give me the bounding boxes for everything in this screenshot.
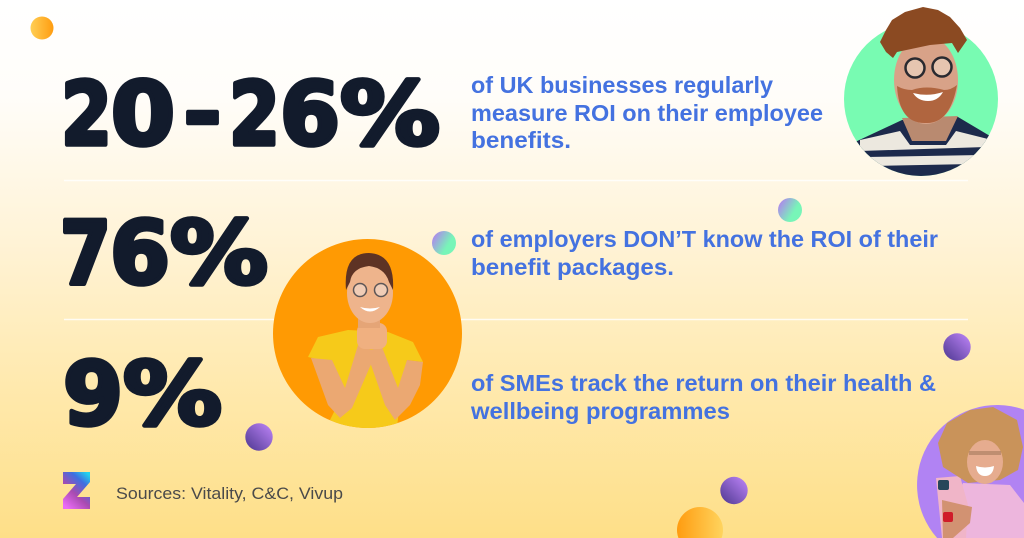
statistic: 20–26%: 2 [61, 64, 112, 166]
statistic: 76%: % [170, 203, 268, 305]
sources note: Sources: Vitality, C&C, Vivup [116, 484, 343, 503]
statistic: 9%: 9 [63, 344, 123, 446]
description: regularly measure ROI: benefits. [471, 127, 571, 153]
description: don't know ROI: benefit packages. [471, 254, 674, 280]
statistic: 76%: 7 [60, 203, 111, 305]
description: don't know ROI [471, 226, 938, 280]
description: regularly measure ROI [471, 72, 823, 153]
description: SMEs track return: wellbeing programmes [470, 398, 730, 424]
description: don't know ROI: of employers DON’T know the ROI of their [471, 226, 938, 252]
statistic: 20–26%: – [184, 61, 221, 163]
divider lines [64, 180, 968, 320]
description: regularly measure ROI: measure ROI on their employee [471, 100, 823, 126]
portrait: woman in yellow on orange circle [273, 239, 462, 428]
logo: Z mark [63, 472, 90, 509]
description: SMEs track return: of SMEs track the return on their health & [471, 370, 936, 396]
portrait: man with glasses on green circle [844, 7, 998, 176]
statistic: 9%: % [123, 344, 222, 446]
statistic: 20–26%: 0 [111, 64, 175, 166]
statistic: 20–26%: 2 [229, 64, 280, 166]
statistic: 20–26%: % [340, 64, 440, 166]
description: SMEs track return [470, 370, 936, 424]
statistic: 20–26%: 6 [280, 64, 340, 166]
description: regularly measure ROI: of UK businesses regularly [471, 72, 773, 98]
portrait: laughing woman with phone on purple circle [917, 405, 1024, 538]
statistic: 76%: 6 [110, 203, 170, 305]
